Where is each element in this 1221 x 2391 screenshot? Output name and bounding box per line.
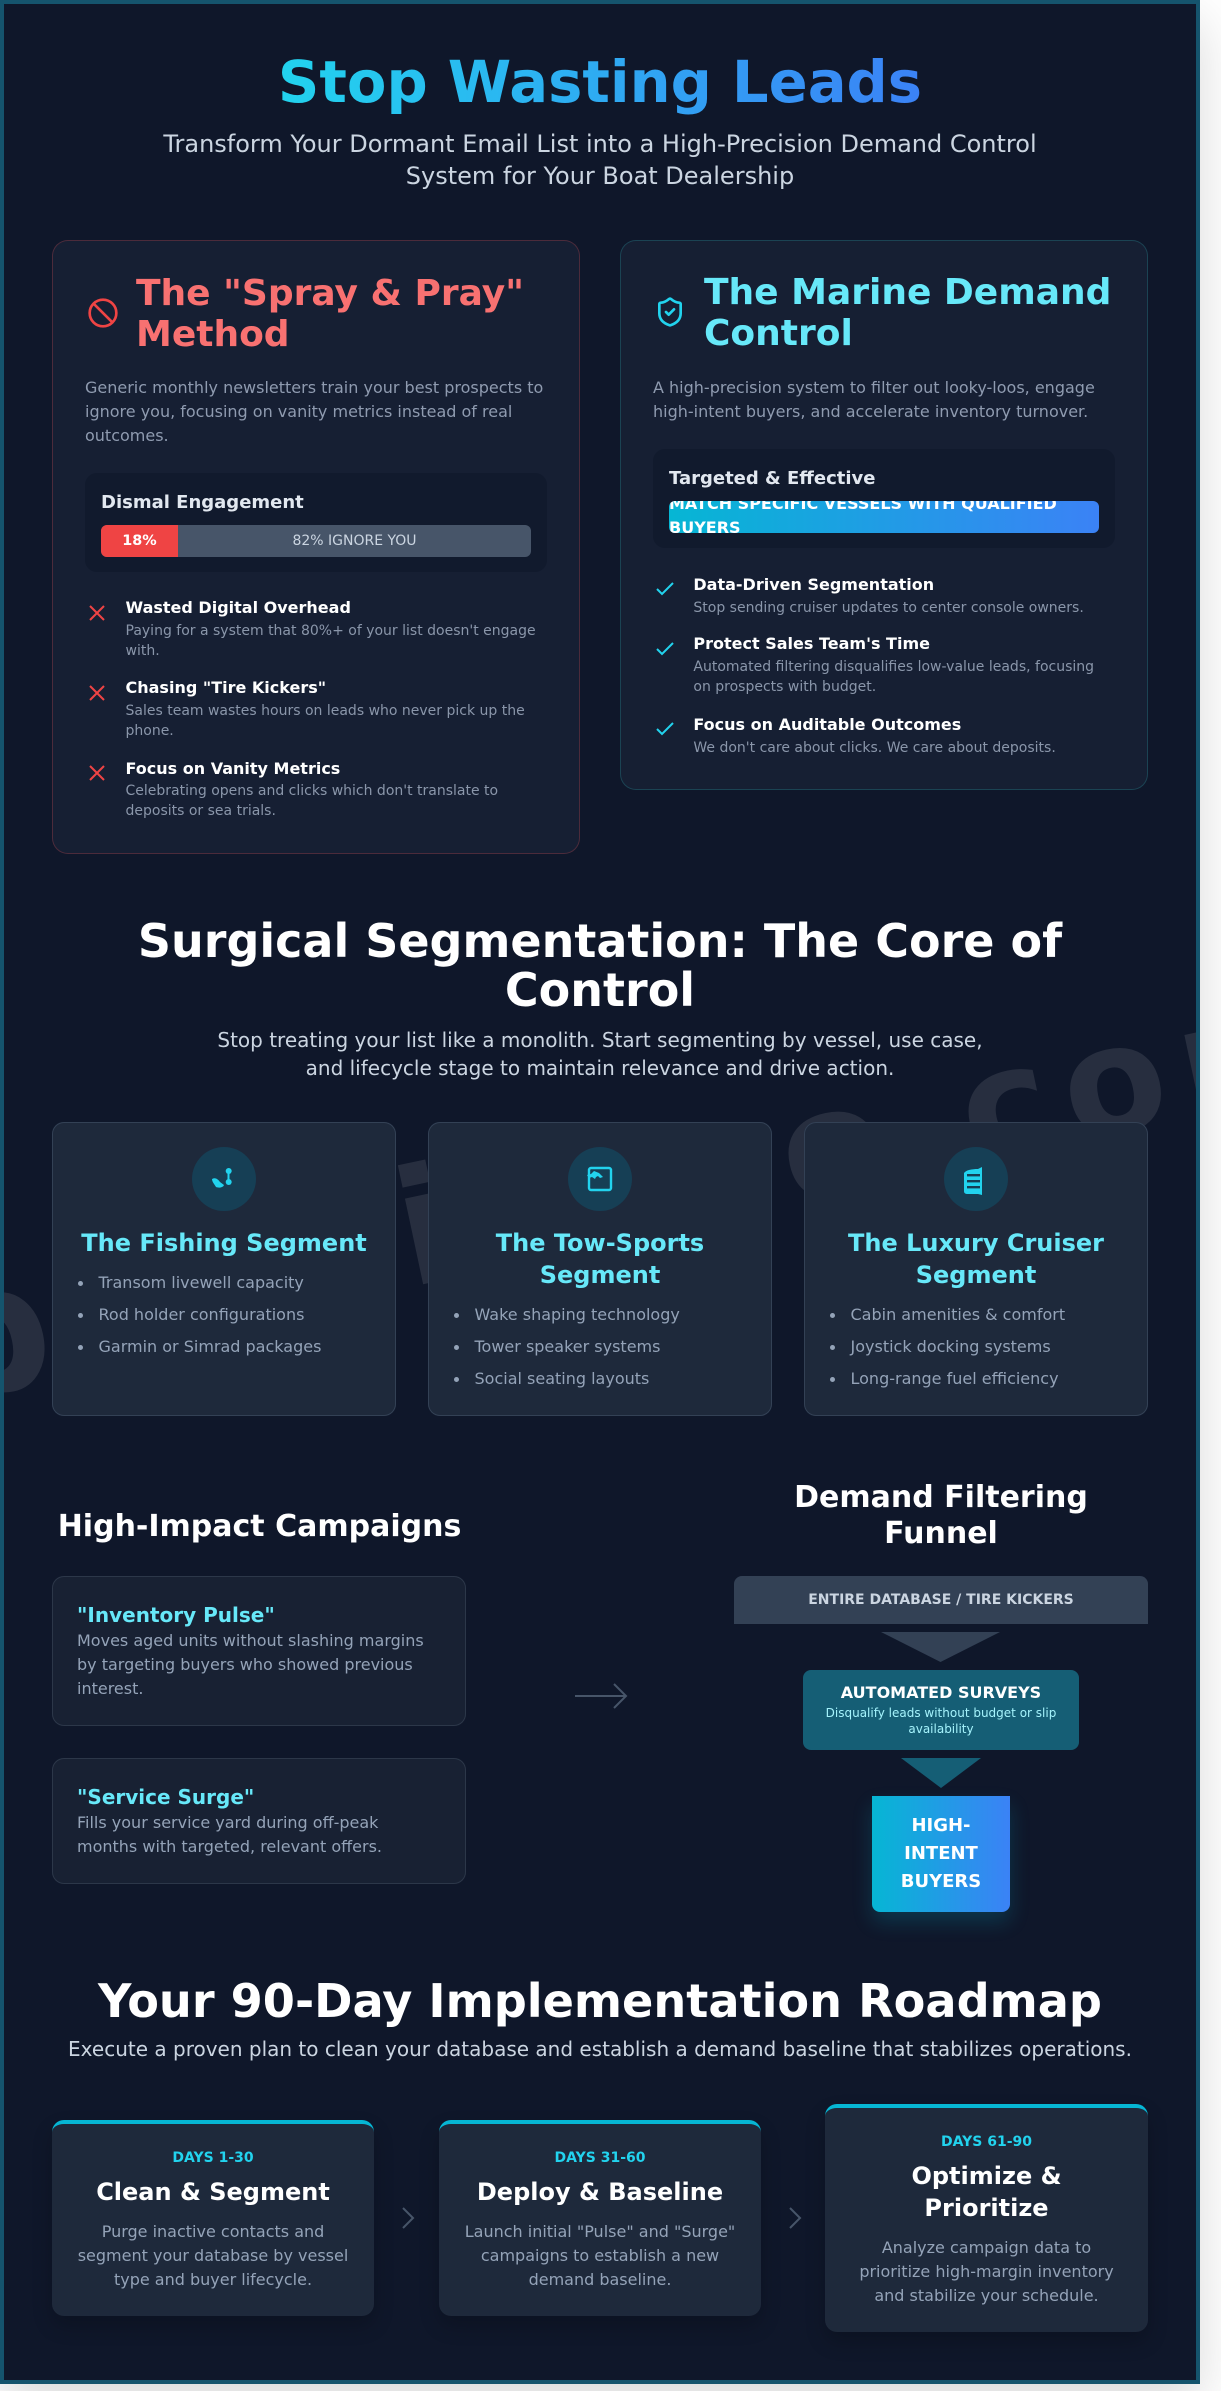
campaign title: "Inventory Pulse" [77,1603,275,1627]
heading: spray and pray [136,273,524,354]
item title: Wasted Digital Overhead [126,598,351,617]
segment title: Segment [540,1261,660,1289]
bullet list: Wake shaping technology [474,1305,680,1324]
bar segment: 18% [101,525,178,557]
item text [126,703,525,739]
segment title: The Fishing Segment [81,1229,367,1257]
heading: demand filtering funnel [794,1480,1088,1551]
item text: deposits or sea trials. [126,803,276,819]
list item: focus on vanity metrics [89,759,498,819]
icon: check [656,582,674,596]
item text [126,623,536,659]
funnel arrow 2 [901,1758,981,1788]
description: ignore you, focusing on vanity metrics instead of real [85,402,512,421]
stage text: Disqualify leads without budget or slip [826,1706,1056,1720]
heading: spray and pray: The "Spray & Pray" [136,273,524,314]
heading: roadmap: Your 90-Day Implementation Roadmap [98,1974,1102,2028]
funnel stage: automated surveys [803,1670,1079,1750]
panel: days 1-30 [52,2120,374,2316]
heading: demand filtering funnel: Funnel [884,1516,998,1551]
arrow: chevron 1 [400,2206,418,2230]
icon: check [656,722,674,736]
campaign text: Fills your service yard during off-peak [77,1812,378,1832]
item text: Celebrating opens and clicks which don't translate to [126,783,498,799]
item text [693,659,1094,695]
bullet list: Joystick docking systems [850,1337,1051,1356]
bullet list: Social seating layouts [474,1369,649,1388]
segment title: The Luxury Cruiser [848,1229,1104,1257]
bullet list [78,1273,321,1356]
campaign text: by targeting buyers who showed previous [77,1654,413,1674]
subtitle [163,130,1037,190]
phase title: Deploy & Baseline [477,2178,723,2206]
item text: Stop sending cruiser updates to center console owners. [693,600,1084,616]
item text: phone. [126,723,174,739]
campaign text: months with targeted, relevant offers. [77,1836,382,1856]
icon: fishing [192,1147,256,1211]
item title: Focus on Vanity Metrics [126,759,340,778]
description: A high-precision system to filter out looky-loos, engage [653,378,1095,397]
section intro: roadmap: Execute a proven plan to clean your database and establish a demand baseline that stabilizes operations. [68,2037,1132,2061]
description [85,378,543,445]
icon: tow-sports [568,1147,632,1211]
item title: Protect Sales Team's Time [693,634,930,653]
phase label: DAYS 61-90 [941,2134,1032,2150]
funnel stage: high-intent buyers [872,1796,1010,1912]
funnel stage: high-intent buyers: HIGH- [911,1815,971,1836]
description: outcomes. [85,426,169,445]
segment title [496,1229,704,1289]
watermark text: i [379,1130,472,1324]
phase text: and stabilize your schedule. [874,2286,1099,2305]
segment title [848,1229,1104,1289]
panel: tow-sports segment [428,1122,772,1416]
bar: match vessels to buyers [669,501,1099,533]
panel: luxury cruiser segment [804,1122,1148,1416]
phase title: Prioritize [924,2194,1049,2222]
campaign title: "Service Surge" [77,1785,254,1809]
item text: with. [126,643,160,659]
funnel stage: high-intent buyers: BUYERS [901,1871,981,1892]
phase text: segment your database by vessel [78,2246,348,2265]
stat label: Targeted & Effective [669,468,875,489]
stage text: availability [908,1722,974,1736]
phase text: Purge inactive contacts and [102,2222,324,2241]
phase text [825,2236,1148,2308]
segment title: Segment [916,1261,1036,1289]
icon: x [89,685,105,701]
watermark text: o [763,1050,900,1241]
heading: surgical segmentation: Surgical Segmentation: The Core of [138,914,1062,968]
arrow: chevron 2 [787,2206,805,2230]
phase title: Clean & Segment [96,2178,330,2206]
list item: chasing tire kickers [89,678,525,739]
section intro: segmentation: and lifecycle stage to maintain relevance and drive action. [306,1056,894,1080]
bullet list: Rod holder configurations [98,1305,304,1324]
item text: Paying for a system that 80%+ of your list doesn't engage [126,623,536,639]
item text [126,783,498,819]
heading: marine demand control: Control [704,312,853,354]
panel: spray and pray method [52,240,580,854]
phase text: prioritize high-margin inventory [859,2262,1114,2281]
campaign text [77,1630,424,1698]
item text: Automated filtering disqualifies low-value leads, focusing [693,659,1094,675]
phase title [825,2160,1148,2224]
panel: marine demand control [620,240,1148,790]
segment title: The Tow-Sports [496,1229,704,1257]
arrow: campaigns to funnel [575,1683,628,1709]
bullet list: Transom livewell capacity [98,1273,304,1292]
heading: demand filtering funnel: Demand Filtering [794,1480,1088,1515]
section intro: segmentation: Stop treating your list like a monolith. Start segmenting by vessel, use case, [217,1028,983,1052]
heading: spray and pray: Method [136,314,290,354]
bullet list: Garmin or Simrad packages [98,1337,321,1356]
title: Stop Wasting Leads [278,49,922,116]
panel: inventory pulse [52,1576,466,1726]
panel: service surge [52,1758,466,1884]
item text: Sales team wastes hours on leads who never pick up the [126,703,525,719]
icon: x [89,605,105,621]
phase text: demand baseline. [529,2270,671,2289]
funnel stage: high-intent buyers: INTENT [904,1843,978,1864]
list item: data-driven segmentation [656,575,1084,616]
item title: Chasing "Tire Kickers" [126,678,326,697]
phase text [439,2220,761,2292]
stat: targeted and effective [653,449,1115,548]
subtitle: Transform Your Dormant Email List into a High-Precision Demand Control [163,130,1037,158]
bar segment: 82% ignore you: 82% IGNORE YOU [292,533,417,549]
stat: dismal engagement [85,473,547,572]
icon: x [89,765,105,781]
list item: wasted digital overhead [89,598,536,659]
panel: days 31-60 [439,2120,761,2316]
list item: protect sales team's time [656,634,1094,695]
bullet list: Long-range fuel efficiency [850,1369,1059,1388]
heading: marine demand control: The Marine Demand [704,272,1111,313]
stage title: AUTOMATED SURVEYS [841,1683,1041,1702]
description: high-intent buyers, and accelerate inventory turnover. [653,402,1088,421]
description [653,378,1095,421]
funnel stage: entire database: ENTIRE DATABASE / TIRE KICKERS [808,1592,1074,1608]
stage text [826,1706,1056,1736]
phase text [78,2222,348,2289]
phase text: type and buyer lifecycle. [114,2270,312,2289]
panel: days 61-90 [825,2104,1148,2332]
phase title: Optimize & [911,2162,1062,2190]
icon: shield check [658,297,682,327]
icon: check [656,642,674,656]
heading: surgical segmentation [138,914,1063,1017]
bar segment: 18%: 18% [122,533,157,549]
phase text: Launch initial "Pulse" and "Surge" [465,2222,735,2241]
item text: on prospects with budget. [693,679,876,695]
phase text: Analyze campaign data to [882,2238,1091,2257]
bullet list [454,1305,680,1388]
item text: We don't care about clicks. We care about deposits. [693,740,1056,756]
campaign text [77,1812,382,1856]
campaign text: Moves aged units without slashing margins [77,1630,424,1650]
heading: high-impact campaigns: High-Impact Campaigns [58,1509,461,1544]
bullet list: Tower speaker systems [474,1337,660,1356]
phase label: DAYS 31-60 [554,2150,646,2166]
bullet list [830,1305,1065,1388]
phase label: DAYS 1-30 [172,2150,254,2166]
bullet list: Cabin amenities & comfort [850,1305,1065,1324]
stat label: Dismal Engagement [101,492,304,513]
section intro: segmentation [217,1028,983,1080]
item title: Focus on Auditable Outcomes [693,714,961,734]
bar text [669,501,1057,533]
icon: ban [88,298,118,328]
description: Generic monthly newsletters train your best prospects to [85,378,543,397]
funnel arrow 1 [881,1632,1000,1662]
campaign text: interest. [77,1678,143,1698]
subtitle: System for Your Boat Dealership [406,162,794,190]
phase text: campaigns to establish a new [481,2246,719,2265]
bar chart: engagement [101,525,531,557]
funnel stage: entire database [734,1576,1148,1624]
list item: focus on auditable outcomes [656,714,1056,756]
heading: marine demand control [704,272,1111,354]
item title: Data-Driven Segmentation [693,575,934,594]
panel: fishing segment [52,1122,396,1416]
heading: surgical segmentation: Control [505,963,695,1017]
icon: cruiser [944,1147,1008,1211]
